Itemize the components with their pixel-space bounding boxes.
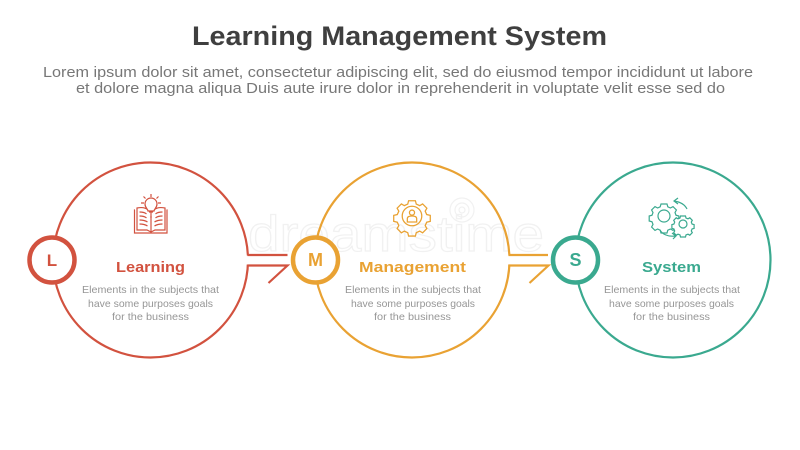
management description: Elements in the subjects that: [345, 284, 481, 296]
badge: S: [553, 238, 598, 282]
subtitle: Lorem ipsum dolor sit amet, consectetur adipiscing elit, sed do eiusmod tempor incididunt ut labore: [43, 65, 753, 81]
panel: learning: [53, 162, 248, 358]
system ring: [576, 162, 770, 358]
arrow: learning to management: [244, 255, 288, 283]
arrow: management to system: [505, 255, 548, 283]
learning description: [82, 284, 219, 323]
learning ring: [53, 162, 248, 358]
subtitle: [43, 65, 753, 97]
management description: have some purposes goals: [351, 298, 475, 310]
icon: gears with cycle arrows: [649, 198, 694, 239]
system description: Elements in the subjects that: [604, 284, 740, 296]
system description: [604, 284, 740, 323]
watermark: dreamstime: [248, 206, 544, 262]
icon: gear with person: [394, 201, 430, 236]
system heading: System: [642, 259, 701, 276]
learning description: for the business: [112, 311, 189, 323]
learning description: have some purposes goals: [88, 298, 213, 310]
badge: S: S: [569, 250, 582, 270]
title: Learning Management System: [192, 21, 607, 51]
system description: for the business: [633, 311, 710, 323]
learning heading: Learning: [116, 259, 185, 276]
panel: management: [314, 162, 510, 358]
badge: L: L: [47, 251, 57, 270]
badge: M: [293, 238, 338, 282]
badge: M: M: [308, 250, 323, 270]
subtitle: et dolore magna aliqua Duis aute irure dolor in reprehenderit in voluptate velit esse sed do: [76, 81, 725, 97]
learning description: Elements in the subjects that: [82, 284, 219, 296]
management ring: [314, 162, 510, 358]
panel: system: [576, 162, 770, 358]
icon: book with light bulb: [134, 194, 167, 233]
badge: L: [30, 238, 74, 282]
management description: for the business: [374, 311, 451, 323]
system description: have some purposes goals: [609, 298, 734, 310]
management heading: Management: [359, 259, 466, 276]
management description: [345, 284, 481, 323]
